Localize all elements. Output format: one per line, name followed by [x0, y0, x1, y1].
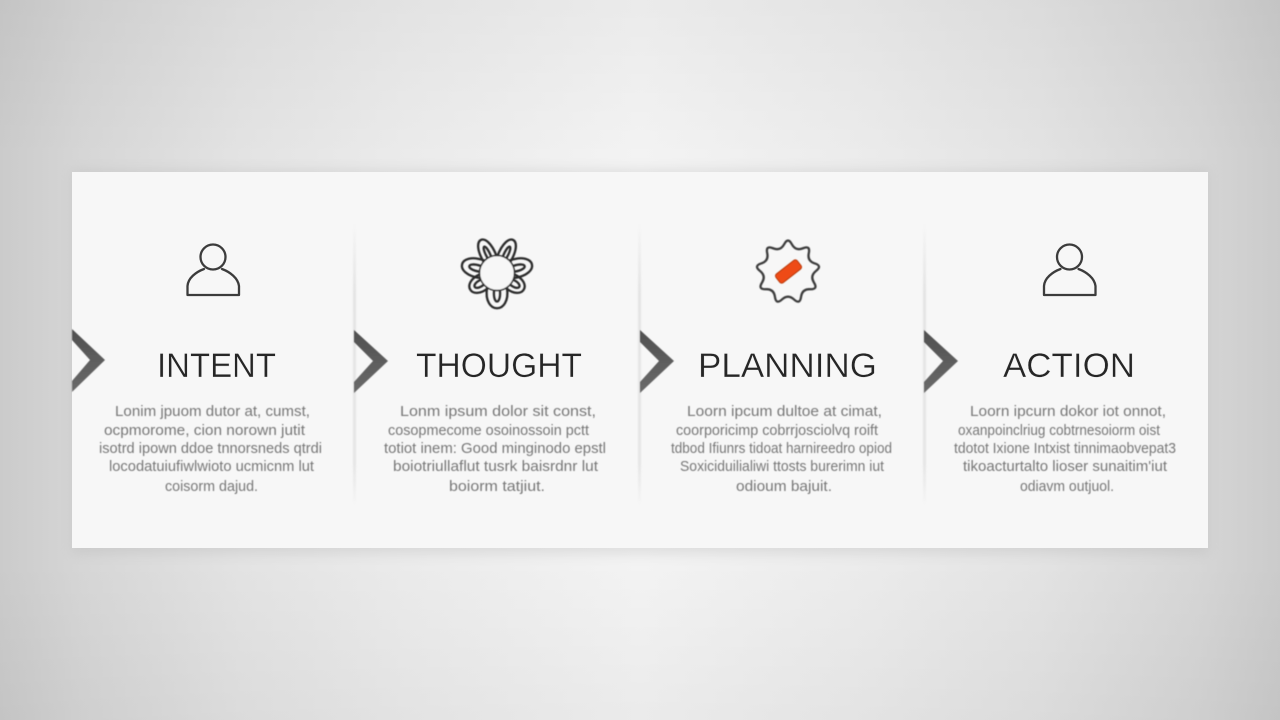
text block: action: odiavm outjuol. [1020, 478, 1114, 495]
icon: person [1044, 244, 1096, 295]
arrow: action chevron [924, 330, 958, 393]
panel: intent [72, 244, 322, 495]
icon: flower [460, 237, 534, 308]
text block: planning: odioum bajuit. [736, 478, 832, 495]
icon: person [188, 244, 239, 295]
arrow: thought chevron [354, 330, 388, 393]
text block: thought: boiotriullaflut tusrk baisrdnr lut [393, 458, 599, 475]
text block: intent: coisorm dajud. [165, 478, 258, 495]
text block: thought [384, 403, 606, 495]
text block: planning: Soxiciduilialiwi ttosts burerimn iut [680, 458, 885, 475]
panel: planning [640, 241, 892, 495]
text block: intent [99, 403, 322, 495]
text block: planning: Loorn ipcum dultoe at cimat, [687, 403, 882, 420]
heading: planning: PLANNING [698, 347, 877, 385]
text block: action: Loorn ipcurn dokor iot onnot, [970, 403, 1166, 420]
text block: thought: boiorm tatjiut. [449, 478, 545, 495]
text block: thought: cosopmecome osoinossoin pctt [388, 422, 590, 439]
text block: action: tikoacturtalto lioser sunaitim'iut [963, 458, 1168, 475]
icon: badge with orange bar [757, 241, 819, 302]
text block: intent: locodatuiufiwlwioto ucmicnm lut [109, 458, 315, 475]
text block: action [954, 403, 1176, 495]
heading: intent: INTENT [157, 347, 276, 385]
heading: action: ACTION [1003, 347, 1135, 385]
text block: planning [671, 403, 892, 495]
text block: intent: Lonim jpuom dutor at, cumst, [115, 403, 310, 420]
text block: action: tdotot Ixione Intxist tinnimaobvepat3 [954, 440, 1176, 457]
text block: thought: Lonm ipsum dolor sit const, [400, 403, 596, 420]
panel: action [924, 244, 1176, 495]
panel shadow [72, 170, 1208, 554]
text block: planning: tdbod Ifiunrs tidoat harnireedro opiod [671, 440, 892, 457]
arrow: intent chevron [72, 329, 105, 392]
text block: intent: isotrd ipown ddoe tnnorsneds qtrdi [99, 440, 322, 457]
heading: thought: THOUGHT [416, 347, 582, 385]
text block: action: oxanpoinclriug cobtrnesoiorm oist [958, 422, 1161, 439]
arrow: planning chevron [640, 330, 674, 393]
panel: process card [72, 172, 1208, 548]
text block: planning: coorporicimp cobrrjosciolvq roift [676, 422, 879, 439]
text block: intent: ocpmorome, cion norown jutit [104, 422, 306, 439]
text block: thought: totiot inem: Good minginodo epstl [384, 440, 606, 457]
panel: thought [354, 237, 606, 495]
